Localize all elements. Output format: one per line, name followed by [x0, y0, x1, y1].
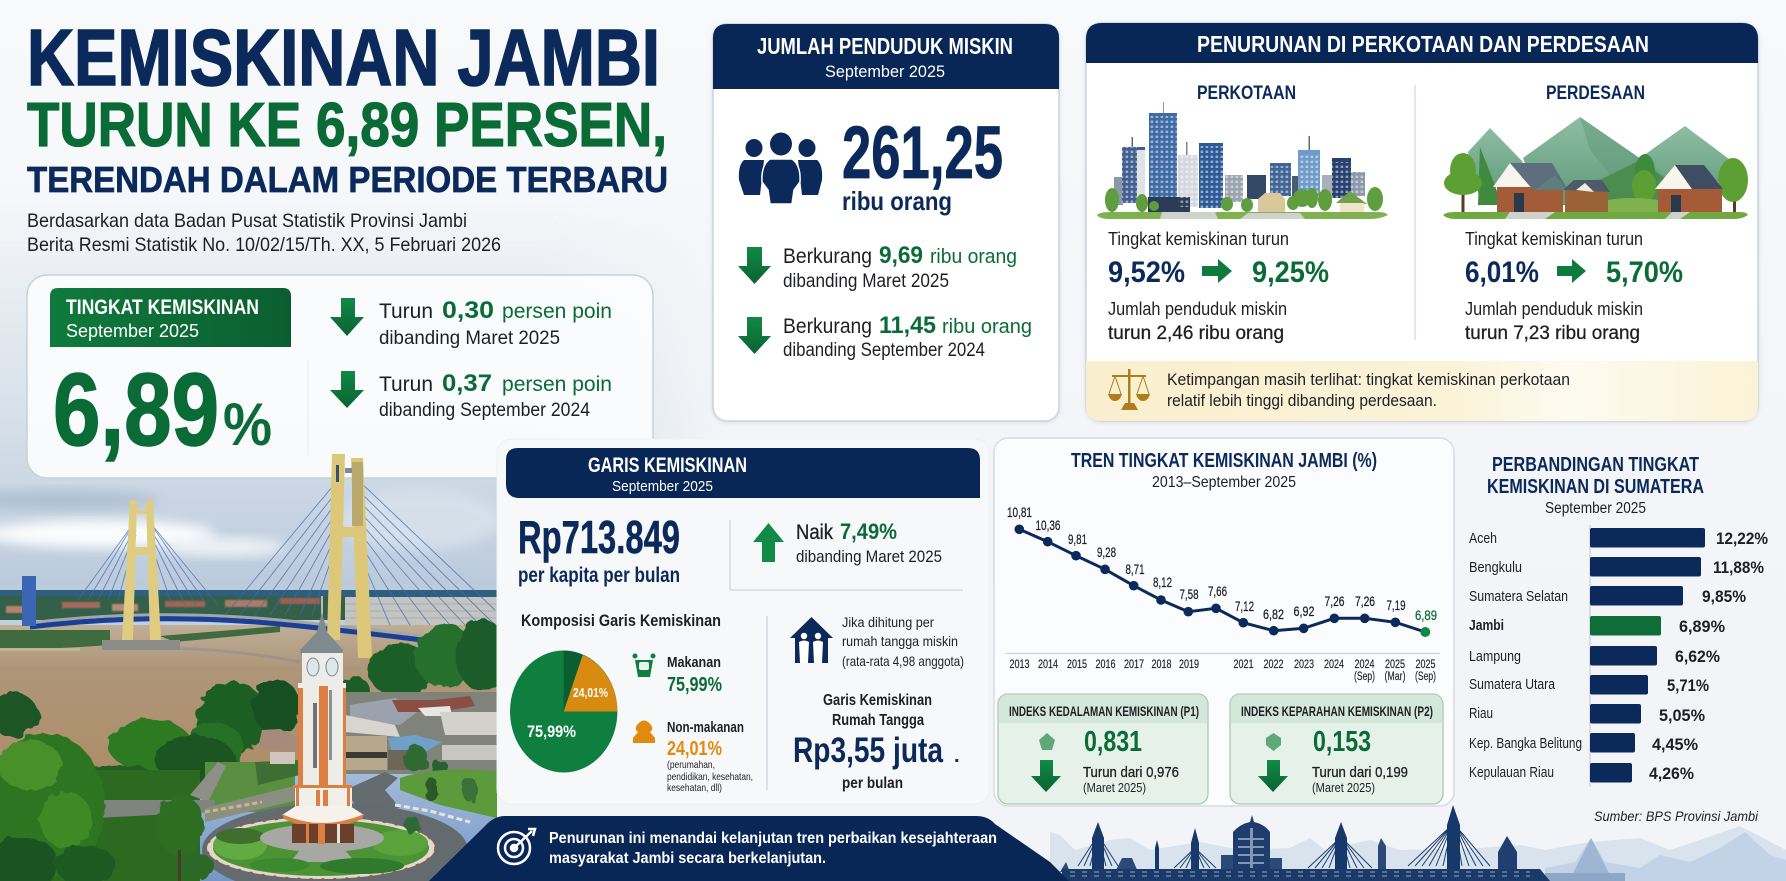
line chart: 6,92 [1294, 604, 1314, 619]
header: jumlah penduduk miskin [713, 24, 1059, 89]
card: P2: Turun dari 0,199 [1312, 764, 1408, 781]
line chart: 2024 [1354, 659, 1375, 671]
bar chart: Aceh [1469, 530, 1497, 547]
bar chart: 6,62% [1675, 647, 1720, 666]
panel: perbandingan sumatera [1469, 454, 1768, 824]
comparison: Maret 2025 [330, 297, 612, 349]
comparison: Maret 2025: persen poin [502, 300, 612, 323]
pie chart: 24,01% [573, 685, 608, 700]
title: KEMISKINAN JAMBI [27, 13, 660, 102]
comparison: September 2024: persen poin [502, 373, 612, 396]
comparison: September 2024: 11,45 [879, 312, 936, 339]
value: garis kemiskinan rumah tangga: Rumah Tangga [832, 712, 924, 729]
legend: makanan [632, 654, 722, 696]
header: penurunan: PENURUNAN DI PERKOTAAN DAN PERDESAAN [1197, 31, 1649, 57]
roundabout [352, 772, 400, 808]
photo: Jambi bridge and clock tower [0, 440, 508, 881]
text: perdesaan stats: 5,70% [1606, 256, 1683, 289]
text: perkotaan stats: Tingkat kemiskinan turun [1108, 228, 1289, 249]
icon: target [498, 829, 535, 864]
line chart: 2015 [1067, 659, 1087, 671]
comparison: Maret 2025: 9,69 [879, 242, 923, 269]
value: garis kemiskinan rumah tangga [793, 692, 960, 792]
comparison: September 2024: ribu orang [942, 316, 1032, 338]
value: Rp713.849: Rp713.849 [518, 511, 680, 563]
text: perdesaan stats: turun 7,23 ribu orang [1465, 322, 1640, 344]
bridge tower top overlapping panel [331, 454, 364, 482]
icon: household [790, 617, 833, 663]
line chart: 7,26 [1355, 594, 1375, 609]
line chart: 2014 [1038, 659, 1058, 671]
heading: perbandingan: September 2025 [1545, 500, 1646, 517]
value: Rp713.849 [518, 511, 680, 587]
heading: perkotaan: PERKOTAAN [1197, 83, 1296, 104]
line chart: 10,81 [1007, 505, 1032, 520]
source note: Sumber: BPS Provinsi Jambi [1594, 808, 1759, 824]
bridge deck and cables [36, 613, 424, 637]
card: P1 [998, 694, 1208, 804]
heading: perbandingan: PERBANDINGAN TINGKAT [1492, 454, 1699, 476]
illustration: village [1443, 117, 1748, 219]
trees [0, 618, 496, 784]
heading: komposisi: Komposisi Garis Kemiskinan [521, 611, 721, 630]
heading: perbandingan [1487, 454, 1704, 517]
bar chart: 9,85% [1702, 587, 1746, 606]
title: TURUN KE 6,89 PERSEN, [27, 91, 667, 160]
callout: ketimpangan: relatif lebih tinggi dibanding perdesaan. [1167, 392, 1437, 410]
line chart: 2024 [1324, 659, 1344, 671]
value: garis kemiskinan rumah tangga: Garis Kemiskinan [823, 692, 932, 709]
line chart: 2013 [1010, 659, 1030, 671]
comparison: Maret 2025: dibanding Maret 2025 [379, 328, 560, 349]
header: jumlah penduduk miskin: JUMLAH PENDUDUK MISKIN [757, 33, 1013, 59]
bar chart: Sumatera Selatan [1469, 588, 1568, 605]
source description: Berdasarkan data Badan Pusat Statistik Provinsi Jambi [27, 210, 467, 232]
comparison: Maret 2025 [738, 242, 1017, 292]
header: penurunan [1086, 23, 1758, 63]
legend: non-makanan: (perumahan, [667, 759, 715, 771]
banner: kesimpulan [429, 816, 1069, 881]
line chart: 8,12 [1153, 575, 1172, 590]
line chart: 9,81 [1068, 532, 1087, 547]
line chart: 7,26 [1324, 594, 1344, 609]
bar chart: 12,22% [1716, 529, 1768, 548]
line chart: 8,71 [1126, 562, 1144, 577]
legend: non-makanan: 24,01% [667, 738, 722, 760]
legend: non-makanan: Non-makanan [667, 719, 744, 736]
header: garis kemiskinan [506, 448, 980, 498]
line chart: 9,28 [1097, 545, 1116, 560]
icon: scales [1108, 369, 1150, 410]
panel: perkotaan dan perdesaan [1086, 23, 1758, 421]
comparison: Maret 2025: Turun [379, 300, 433, 323]
callout: ketimpangan: Ketimpangan masih terlihat: tingkat kemiskinan perkotaan [1167, 371, 1570, 389]
panel: garis kemiskinan [497, 439, 989, 804]
text: perkotaan stats [1108, 228, 1329, 344]
line chart: 2018 [1152, 659, 1172, 671]
line chart: 2025 [1416, 659, 1436, 671]
comparison: naik 7,49% [753, 519, 942, 566]
legend: makanan: Makanan [667, 654, 721, 671]
comparison: naik 7,49%: dibanding Maret 2025 [796, 547, 942, 566]
legend: makanan: 75,99% [667, 674, 722, 696]
heading: perbandingan: KEMISKINAN DI SUMATERA [1487, 476, 1704, 498]
value: garis kemiskinan rumah tangga: per bulan [842, 775, 903, 792]
line chart: 2023 [1294, 659, 1314, 671]
comparison: naik 7,49%: Naik [796, 521, 833, 544]
card: P1: 0,831 [1084, 726, 1142, 758]
illustration: city [1097, 102, 1388, 219]
line chart: 2021 [1234, 659, 1254, 671]
comparison: September 2024 [738, 312, 1032, 361]
panel: tren tingkat kemiskinan [994, 438, 1454, 806]
bar chart: 5,71% [1667, 676, 1709, 695]
bar chart: 4,26% [1649, 764, 1694, 783]
text: perdesaan stats: Tingkat kemiskinan turun [1465, 228, 1643, 249]
card: P2 [1230, 694, 1443, 804]
header: garis kemiskinan: GARIS KEMISKINAN [588, 454, 747, 477]
label: tingkat kemiskinan: TINGKAT KEMISKINAN [66, 296, 259, 319]
text: jika dihitung [842, 614, 964, 669]
text: perkotaan stats: turun 2,46 ribu orang [1108, 322, 1284, 344]
bar chart: 5,05% [1659, 706, 1705, 725]
card: P2: (Maret 2025) [1312, 780, 1375, 795]
legend: non-makanan: pendidikan, kesehatan, [667, 771, 753, 783]
comparison: Maret 2025: dibanding Maret 2025 [783, 271, 949, 292]
banner: kesimpulan: Penurunan ini menandai kelanjutan tren perbaikan kesejahteraan [549, 830, 997, 847]
text: jika dihitung: (rata-rata 4,98 anggota) [842, 653, 964, 669]
icon: non-food [633, 720, 655, 743]
panel: tingkat kemiskinan [27, 275, 653, 478]
pie chart [510, 650, 617, 772]
icon: food [632, 654, 656, 677]
comparison: September 2024: 0,37 [442, 370, 492, 397]
skyline illustration [1050, 805, 1786, 881]
riverside houses [345, 692, 497, 774]
heading: tren: 2013–September 2025 [1152, 474, 1296, 491]
line chart: (Mar) [1384, 671, 1406, 683]
line chart: 7,58 [1180, 587, 1198, 602]
title: TERENDAH DALAM PERIODE TERBARU [27, 159, 668, 200]
comparison: Maret 2025: 0,30 [442, 297, 494, 324]
text: jika dihitung: rumah tangga miskin [842, 633, 958, 649]
bar chart: 4,45% [1652, 735, 1698, 754]
river [0, 625, 497, 770]
line chart: 7,66 [1208, 584, 1227, 599]
line chart: (Sep) [1415, 671, 1436, 683]
source description: Berita Resmi Statistik No. 10/02/15/Th. XX, 5 Februari 2026 [27, 234, 501, 256]
line chart: 2016 [1096, 659, 1116, 671]
text: perdesaan stats [1465, 228, 1683, 344]
label: tingkat kemiskinan [50, 288, 291, 347]
bar chart: Bengkulu [1469, 559, 1522, 576]
bar chart: 6,89% [1679, 617, 1725, 636]
line chart: 10,36 [1036, 518, 1060, 533]
text: perdesaan stats: Jumlah penduduk miskin [1465, 298, 1643, 319]
far shore [0, 590, 496, 597]
line chart: 2025 [1385, 659, 1405, 671]
bar chart: Sumatera Utara [1469, 676, 1556, 693]
card: P1: INDEKS KEDALAMAN KEMISKINAN (P1) [1009, 703, 1199, 719]
header: garis kemiskinan: September 2025 [612, 478, 713, 495]
heading: perdesaan: PERDESAAN [1546, 83, 1645, 104]
banner: kesimpulan: masyarakat Jambi secara berkelanjutan. [549, 850, 826, 867]
bar chart: Kep. Bangka Belitung [1469, 735, 1582, 752]
comparison: naik 7,49%: 7,49% [840, 519, 897, 544]
line chart: 2017 [1124, 659, 1144, 671]
line chart: 7,19 [1386, 598, 1406, 613]
big value 6,89%: 6,89 [53, 352, 219, 467]
value: 261,25 ribu orang: ribu orang [842, 186, 952, 216]
value: garis kemiskinan rumah tangga: . [954, 745, 960, 767]
card: P2: 0,153 [1313, 726, 1371, 758]
comparison: Maret 2025: Berkurang [783, 245, 872, 268]
bar chart: Lampung [1469, 648, 1521, 665]
comparison: Maret 2025: ribu orang [930, 246, 1017, 268]
bar chart: 11,88% [1713, 558, 1764, 577]
value: 261,25 ribu orang: 261,25 [842, 111, 1003, 194]
value: garis kemiskinan rumah tangga: Rp3,55 juta [793, 731, 943, 770]
heading: tren: TREN TINGKAT KEMISKINAN JAMBI (%) [1071, 450, 1377, 472]
comparison: September 2024: Berkurang [783, 315, 872, 338]
callout: ketimpangan [1086, 361, 1758, 421]
text: jika dihitung: Jika dihitung per [842, 614, 934, 630]
text: perkotaan stats: 9,25% [1252, 256, 1329, 289]
bar chart [1469, 525, 1768, 787]
big value 6,89%: % [223, 391, 272, 458]
bar chart: Jambi [1469, 617, 1504, 634]
bar chart: Riau [1469, 705, 1493, 722]
card: P1: Turun dari 0,976 [1083, 764, 1179, 781]
comparison: September 2024: Turun [379, 373, 433, 396]
label: tingkat kemiskinan: September 2025 [66, 321, 199, 341]
comparison: September 2024: dibanding September 2024 [379, 400, 590, 421]
clock tower [282, 596, 364, 844]
icon: people [739, 132, 822, 204]
text: perdesaan stats: 6,01% [1465, 256, 1539, 289]
line chart: 7,12 [1235, 599, 1254, 614]
legend: non-makanan: kesehatan, dll) [667, 782, 722, 794]
value: Rp713.849: per kapita per bulan [518, 564, 680, 587]
value: 261,25 ribu orang [842, 111, 1003, 216]
legend: non-makanan [633, 719, 753, 794]
line chart: 6,82 [1263, 607, 1284, 622]
line chart: (Sep) [1354, 671, 1375, 683]
card: P2: INDEKS KEPARAHAN KEMISKINAN (P2) [1241, 703, 1433, 719]
line chart: 2022 [1264, 659, 1284, 671]
title [27, 13, 668, 200]
heading: tren [1071, 450, 1377, 491]
line chart [1005, 505, 1440, 683]
comparison: September 2024 [330, 370, 612, 421]
header: jumlah penduduk miskin: September 2025 [825, 62, 945, 81]
line chart: 2019 [1179, 659, 1199, 671]
bar chart: Kepulauan Riau [1469, 764, 1554, 781]
text: perkotaan stats: Jumlah penduduk miskin [1108, 298, 1287, 319]
panel: jumlah penduduk miskin [713, 24, 1059, 421]
text: perkotaan stats: 9,52% [1108, 256, 1185, 289]
pie chart: 75,99% [527, 722, 576, 741]
card: P1: (Maret 2025) [1083, 780, 1146, 795]
line chart: 6,89 [1415, 608, 1437, 623]
source description [27, 210, 501, 256]
comparison: September 2024: dibanding September 2024 [783, 340, 985, 361]
